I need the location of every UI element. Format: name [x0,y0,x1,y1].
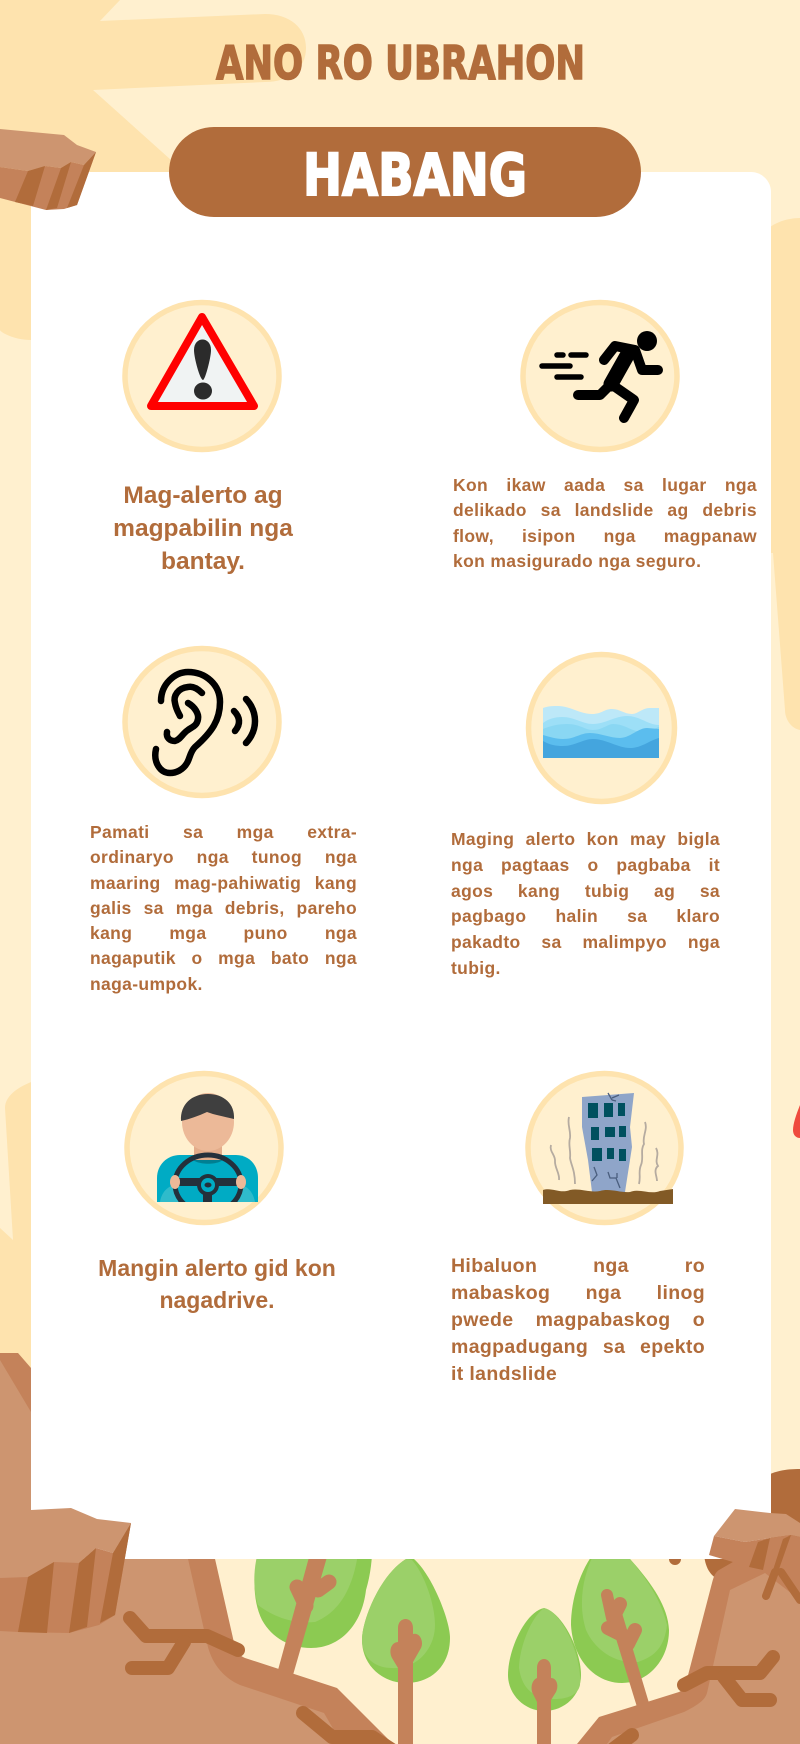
left rock wall [0,1353,31,1520]
background shape: right strip [760,218,800,730]
text block: Hibaluon: pwede magpabaskog o [451,1309,705,1331]
text block: Maging alerto [451,829,720,978]
icon: damaged building [528,1074,681,1222]
text block: Mangin alerto [98,1255,336,1313]
text block: Pamati: ordinaryo nga tunog nga [90,847,357,867]
text block: Maging alerto: pagbago halin sa klaro [451,906,720,926]
text block: Maging alerto: pakadto sa malimpyo nga [451,932,720,952]
text block: Hibaluon: mabaskog nga linog [451,1282,705,1304]
rock chunk: bottom left [0,1508,131,1633]
text block: Mangin alerto: nagadrive. [159,1287,275,1313]
panel: white card [31,172,771,1559]
text block: Maging alerto: nga pagtaas o pagbaba it [451,855,720,875]
right ground cracks [612,1657,773,1744]
right ground rock [577,1555,800,1744]
icon: driver [127,1074,281,1222]
text block: Hibaluon [451,1255,705,1385]
background shape: top-left burst [0,0,306,340]
text block: Hibaluon: it landslide [451,1363,557,1385]
text block: Pamati: Pamati sa mga extra- [90,822,357,842]
dark rock behind right side [669,1469,800,1580]
text block: Kon ikaw aada: flow, isipon nga magpanaw [453,526,757,546]
icon: ear [125,648,279,796]
text block: Pamati: kang mga puno nga [90,923,357,943]
text block: Pamati: maaring mag-pahiwatig kang [90,873,357,893]
tree: back right [571,1550,669,1707]
text block: Mag-alerto: bantay. [161,548,245,575]
text block: Hibaluon: magpadugang sa epekto [451,1336,705,1358]
text block: Pamati: galis sa mga debris, pareho [90,898,357,918]
heading pill: HABANG [303,141,527,209]
left ground cracks [130,1618,392,1744]
text block: Pamati: nagaputik o mga bato nga [90,948,357,968]
text block: Kon ikaw aada [453,475,757,571]
rock chunk: bottom right [709,1509,800,1600]
text block: Maging alerto: tubig. [451,958,501,978]
icon: water [528,654,674,802]
text block: Kon ikaw aada: kon masigurado nga seguro. [453,551,701,571]
text block: Mag-alerto: Mag-alerto ag [123,482,283,509]
text block: Pamati: naga-umpok. [90,974,203,994]
text block: Mag-alerto: magpabilin nga [113,515,293,542]
text block: Kon ikaw aada: Kon ikaw aada sa lugar nga [453,475,757,495]
title: ANO RO UBRAHON [216,36,585,90]
icon: warning triangle [125,302,279,450]
text block: Kon ikaw aada: delikado sa landslide ag debris [453,500,757,520]
tree: centre small [508,1608,581,1744]
text block: Mangin alerto: Mangin alerto gid kon [98,1255,336,1281]
tree: back left [254,1530,372,1675]
text block: Hibaluon: Hibaluon nga ro [451,1255,705,1277]
text block: Pamati [90,822,357,994]
text block: Maging alerto: agos kang tubig ag sa [451,881,720,901]
rock chunk: top left [0,129,96,210]
text block: Maging alerto: Maging alerto kon may bigla [451,829,720,849]
icon: running person [523,302,677,450]
red blob at right edge [793,1105,800,1138]
text block: Mag-alerto [113,482,294,575]
background shape: left lower strip [0,1079,40,1400]
left ground rock [0,1550,393,1744]
tree: centre tall [362,1559,450,1744]
heading pill [169,127,641,217]
